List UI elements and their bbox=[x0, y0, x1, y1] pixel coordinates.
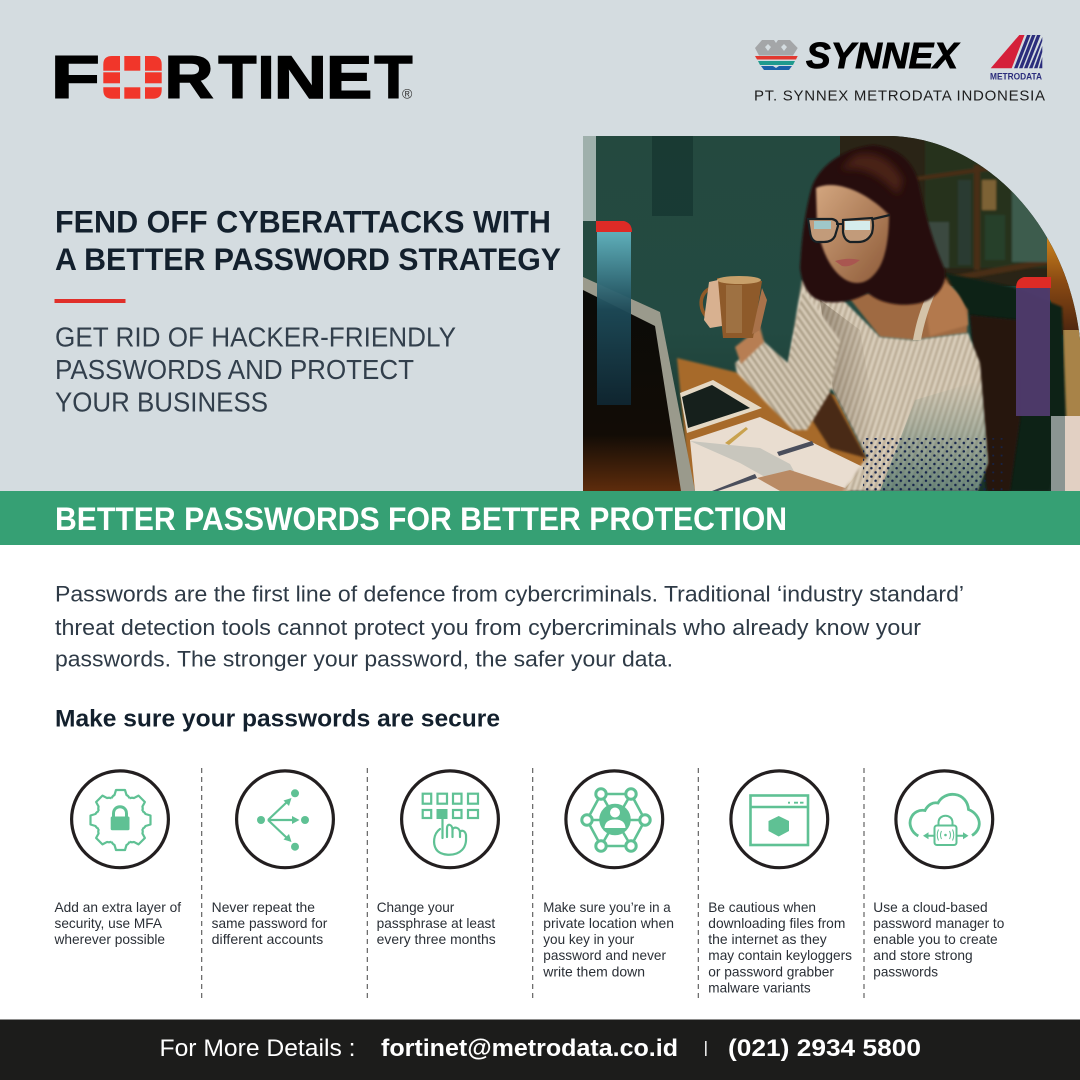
photo notebook and paper bbox=[690, 417, 863, 491]
tip text: change passphrase: every three months bbox=[377, 932, 496, 947]
photo mug bbox=[701, 276, 767, 338]
intro paragraph: threat detection tools cannot protect you from cybercriminals who already know your bbox=[55, 615, 922, 640]
logo: Metrodata: METRODATA bbox=[990, 71, 1042, 82]
tip text: private location: password and never bbox=[543, 948, 666, 963]
tip text: password manager: passwords bbox=[873, 965, 938, 980]
tip text: cautious downloads: malware variants bbox=[708, 981, 811, 996]
photo woman hair bbox=[800, 145, 945, 305]
tip text: password manager: Use a cloud-based bbox=[873, 900, 988, 915]
tip text: unique passwords bbox=[212, 900, 328, 947]
photo monitor bbox=[583, 277, 695, 491]
logo: Fortinet: E bbox=[326, 43, 372, 111]
logo: Fortinet: ® bbox=[402, 86, 413, 102]
tip text: password manager: and store strong bbox=[873, 948, 973, 963]
icon: keypad and finger bbox=[402, 771, 498, 868]
tip text: change passphrase: passphrase at least bbox=[377, 916, 495, 931]
headline: FEND OFF CYBERATTACKS WITH bbox=[55, 204, 551, 240]
footer contact bar: For More Details : bbox=[160, 1035, 356, 1062]
intro paragraph: Passwords are the first line of defence from cybercriminals. Traditional ‘industry standard’ bbox=[55, 582, 964, 607]
icon: browser window with malware hexagon bbox=[731, 771, 828, 868]
header background bbox=[0, 0, 1080, 491]
subheading: YOUR BUSINESS bbox=[55, 387, 268, 418]
photo face bbox=[816, 185, 889, 283]
icon: gear with padlock bbox=[72, 771, 168, 868]
red accent rule bbox=[54, 299, 126, 303]
tip text: password manager: enable you to create bbox=[873, 932, 998, 947]
tip text: password manager: password manager to bbox=[873, 916, 1004, 931]
tip text: MFA: security, use MFA bbox=[54, 916, 163, 931]
tip text: cautious downloads: may contain keyloggers bbox=[708, 948, 852, 963]
logo: Fortinet: I bbox=[258, 43, 274, 111]
icon: Synnex emblem bbox=[755, 40, 798, 70]
tip text: unique passwords: different accounts bbox=[212, 932, 323, 947]
logo: Fortinet bbox=[51, 43, 413, 112]
photo lips bbox=[835, 259, 860, 266]
photo chair bbox=[945, 273, 1066, 491]
footer contact bar: fortinet@metrodata.co.id bbox=[381, 1035, 678, 1062]
headline bbox=[55, 204, 561, 277]
subheading bbox=[55, 322, 456, 418]
tip text: private location: private location when bbox=[543, 916, 674, 931]
photo blouse strap bbox=[913, 294, 935, 340]
photo glasses bbox=[808, 215, 890, 242]
tip text: MFA: Add an extra layer of bbox=[54, 900, 181, 915]
logo: Fortinet: N bbox=[274, 44, 327, 111]
icon: person in network bbox=[566, 771, 663, 868]
logo: Fortinet: T bbox=[374, 44, 412, 112]
overlay: right purple bar bbox=[1016, 277, 1051, 416]
photo orange lamp glow bbox=[1047, 238, 1080, 335]
logo: Metrodata bbox=[990, 35, 1042, 82]
icon: cloud password manager bbox=[896, 771, 993, 868]
logo: Synnex: SYNNEX bbox=[806, 35, 961, 76]
tip text: cautious downloads: downloading files from bbox=[708, 916, 845, 931]
tips heading: Make sure your passwords are secure bbox=[55, 706, 500, 733]
intro paragraph: passwords. The stronger your password, the safer your data. bbox=[55, 647, 673, 672]
icon: arrows to separate accounts bbox=[237, 771, 333, 868]
company name: PT. SYNNEX METRODATA INDONESIA bbox=[754, 88, 1045, 105]
photo: woman with coffee at computer bbox=[583, 136, 1080, 491]
intro paragraph bbox=[55, 582, 964, 672]
tip text: cautious downloads: the internet as they bbox=[708, 932, 827, 947]
tip text: cautious downloads: Be cautious when bbox=[708, 900, 816, 915]
subheading: GET RID OF HACKER-FRIENDLY bbox=[55, 322, 456, 353]
tip text: private location: write them down bbox=[542, 965, 645, 980]
section banner bbox=[0, 491, 1080, 545]
subheading: PASSWORDS AND PROTECT bbox=[55, 354, 414, 385]
logo: Fortinet: F bbox=[51, 44, 100, 112]
tip text: unique passwords: Never repeat the bbox=[212, 900, 315, 915]
logo: Fortinet: R bbox=[164, 43, 213, 111]
tip text: change passphrase bbox=[377, 900, 496, 947]
footer contact bar bbox=[0, 1020, 1080, 1080]
photo sleeve bbox=[735, 290, 840, 430]
tip text: private location bbox=[542, 900, 674, 980]
photo tablet bbox=[680, 380, 762, 433]
tip text: password manager bbox=[873, 900, 1004, 980]
logo: Fortinet: T bbox=[218, 44, 256, 112]
overlay: top-left pale strip bbox=[583, 136, 596, 221]
photo wall bbox=[583, 136, 1080, 491]
overlay: left gradient bar bbox=[596, 221, 632, 405]
logo: Fortinet red emblem bbox=[103, 56, 162, 99]
overlay: dark square bbox=[652, 136, 693, 216]
tip text: MFA: wherever possible bbox=[53, 932, 165, 947]
tip text: MFA bbox=[53, 900, 181, 947]
section banner: BETTER PASSWORDS FOR BETTER PROTECTION bbox=[55, 501, 787, 537]
tip text: private location: you key in your bbox=[543, 932, 635, 947]
photo desk bbox=[677, 358, 868, 491]
photo halftone dots bbox=[863, 438, 1007, 491]
tip text: private location: Make sure you’re in a bbox=[543, 900, 671, 915]
photo blouse bbox=[787, 280, 988, 491]
tip text: cautious downloads bbox=[708, 900, 852, 996]
tip text: change passphrase: Change your bbox=[377, 900, 455, 915]
tip text: cautious downloads: or password grabber bbox=[708, 965, 834, 980]
photo shoulder and chest skin bbox=[847, 278, 968, 340]
photo forearm bbox=[735, 327, 764, 364]
overlay: bottom-right pale strips bbox=[1051, 416, 1080, 491]
footer contact bar: (021) 2934 5800 bbox=[728, 1035, 921, 1062]
headline: A BETTER PASSWORD STRATEGY bbox=[55, 241, 561, 277]
tip text: unique passwords: same password for bbox=[212, 916, 328, 931]
photo shelves bbox=[912, 138, 1055, 283]
